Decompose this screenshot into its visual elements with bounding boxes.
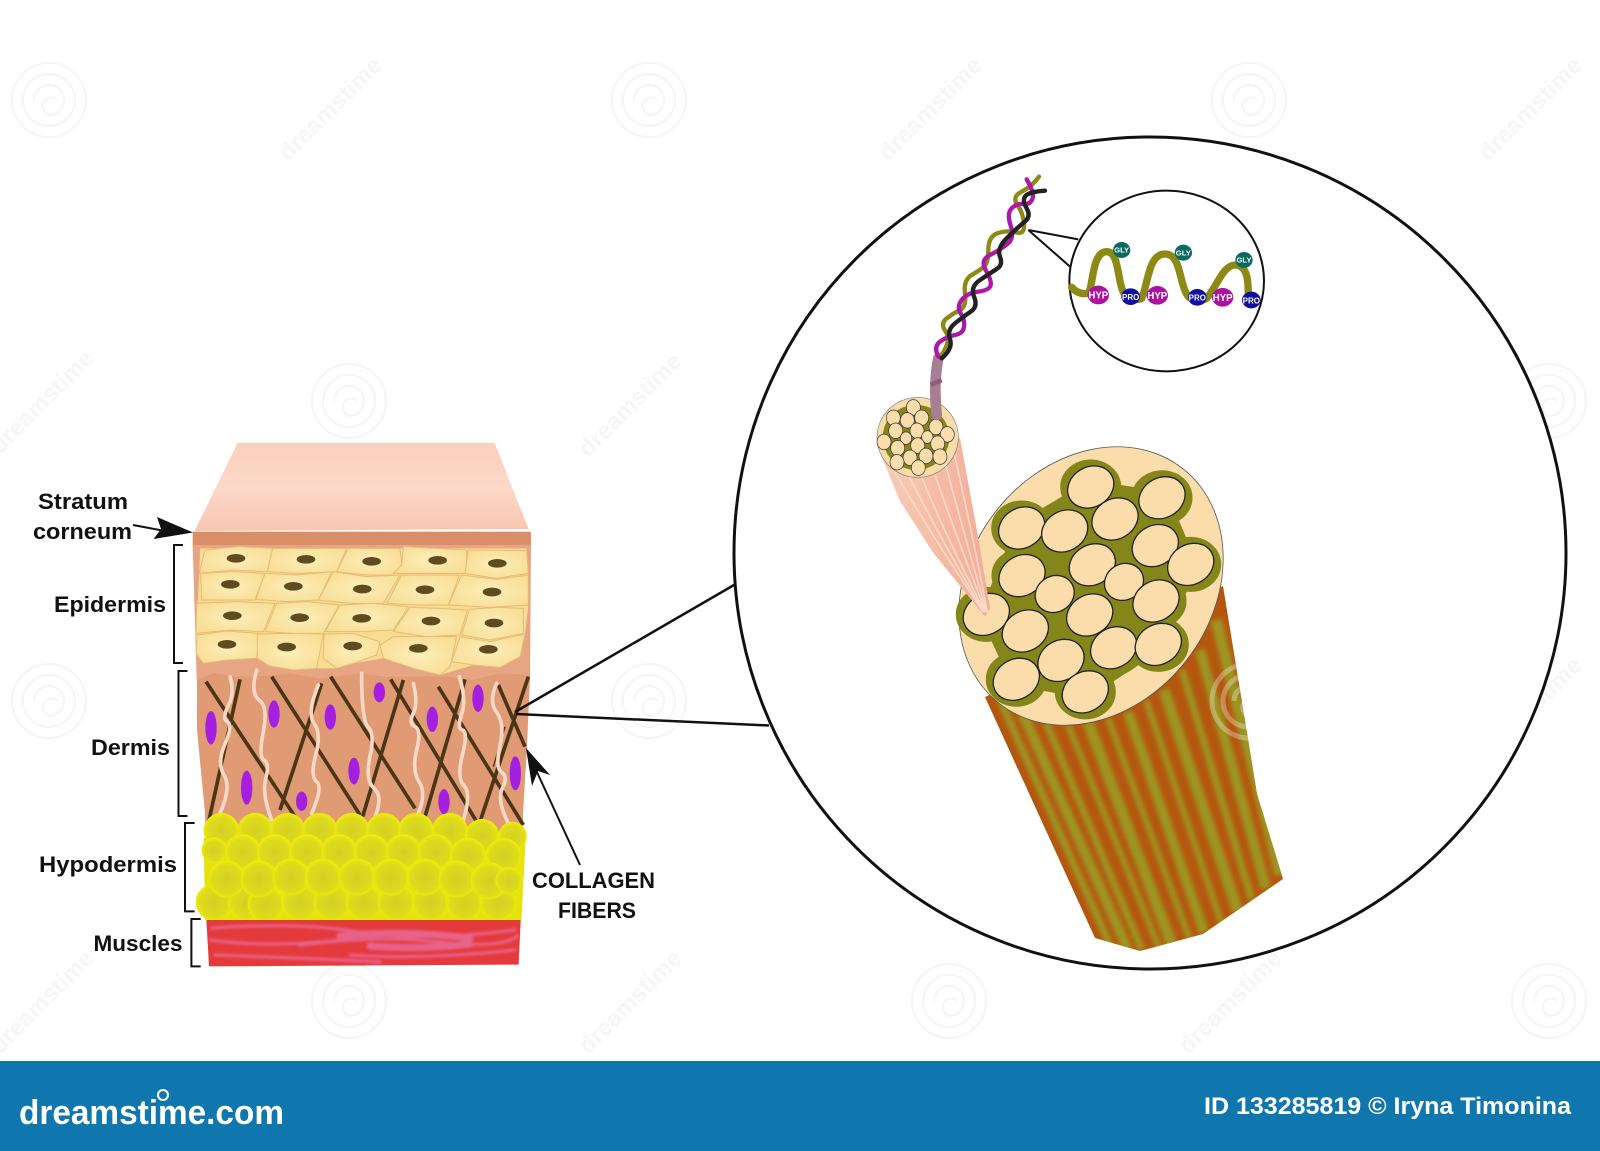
fibrils <box>956 458 1221 721</box>
arrow: collagen fibers <box>526 748 580 865</box>
brackets <box>174 545 201 966</box>
watermark: diagonal text: dreamstime <box>873 52 988 166</box>
watermark: diagonal text: dreamstime <box>573 945 688 1059</box>
layer labels: Stratum <box>38 489 128 514</box>
watermark: diagonal text: dreamstime <box>1173 945 1288 1059</box>
layer labels: Hypodermis <box>39 852 177 877</box>
skin body <box>193 532 531 920</box>
amino acid beads: HYP <box>1088 291 1109 302</box>
epidermis layer <box>193 532 531 680</box>
layer labels: Epidermis <box>54 592 166 617</box>
watermark: diagonal text: dreamstime <box>1173 348 1288 462</box>
zoom lines to large circle <box>515 585 769 726</box>
layer labels <box>33 489 182 956</box>
layer labels: corneum <box>33 519 132 544</box>
stem <box>931 358 942 415</box>
amino acid beads: GLY <box>1236 256 1252 265</box>
watermark: diagonal text: dreamstime <box>873 652 988 766</box>
amino acid beads: PRO <box>1243 296 1260 305</box>
amino acid beads: PRO <box>1189 294 1206 303</box>
olive matrix <box>962 466 1215 713</box>
watermark: diagonal text: dreamstime <box>1473 652 1588 766</box>
muscle layer <box>206 920 521 966</box>
watermark: diagonal text: dreamstime <box>573 348 688 462</box>
large magnified circle <box>734 137 1566 969</box>
brand spiral icon <box>158 1090 168 1100</box>
skin top face <box>195 443 529 531</box>
collagen fibers label: COLLAGEN <box>532 868 655 893</box>
watermark: diagonal text: dreamstime <box>273 52 388 166</box>
large fiber cross-section <box>904 394 1278 778</box>
layer labels: Dermis <box>91 735 170 760</box>
amino acid beads: GLY <box>1114 246 1129 255</box>
amino acid beads: HYP <box>1213 293 1233 304</box>
layer labels: Muscles <box>94 931 182 956</box>
helix strands <box>936 177 1045 358</box>
triple helix and detail <box>931 177 1264 415</box>
bottom credit band <box>0 1061 1600 1151</box>
small fiber cross-section <box>877 397 958 477</box>
collagen fibers label <box>532 868 655 923</box>
pink fibril cone <box>882 438 990 617</box>
dermis layer with collagen fibers <box>205 670 528 825</box>
image id and author: ID 133285819 © Iryna Timonina <box>1204 1093 1572 1120</box>
hypodermis fat cells <box>196 813 527 922</box>
amino acid beads <box>1088 242 1261 308</box>
small detail circle <box>1069 191 1264 371</box>
amino acid chain <box>1072 252 1248 300</box>
collagen fiber rope <box>985 586 1283 951</box>
collagen fibers label: FIBERS <box>558 898 636 923</box>
amino acid beads: PRO <box>1122 293 1139 302</box>
watermark overlay on artwork <box>1212 664 1286 738</box>
amino acid beads: GLY <box>1176 248 1191 257</box>
arrow: stratum corneum <box>133 517 193 539</box>
skin block diagram <box>193 443 531 966</box>
zoom lines to small circle <box>1028 230 1078 267</box>
watermark: diagonal text: dreamstime <box>1473 52 1588 166</box>
amino acid beads: HYP <box>1147 291 1168 302</box>
brand name: dreamstime.com <box>19 1094 284 1132</box>
